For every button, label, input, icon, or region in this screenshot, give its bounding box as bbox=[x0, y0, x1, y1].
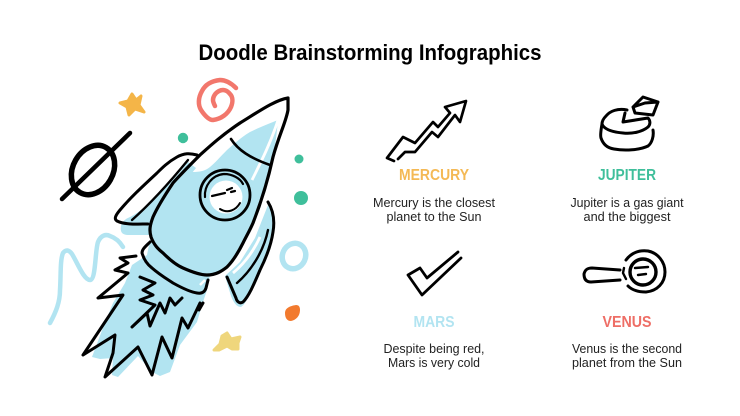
white highlight on fin bbox=[233, 237, 260, 273]
left fin inner line bbox=[132, 160, 188, 220]
icon: pie chart bbox=[601, 97, 658, 150]
nose band bbox=[231, 139, 270, 165]
illustration: rocket bbox=[83, 98, 288, 377]
decoration: orange star bbox=[120, 94, 144, 115]
right fin inner line bbox=[237, 230, 268, 283]
heading: jupiter: JUPITER bbox=[598, 167, 656, 184]
text: venus description: planet from the Sun bbox=[572, 356, 682, 370]
rocket body blue fill bbox=[150, 120, 278, 275]
left fin blue fill bbox=[121, 162, 196, 235]
right fin bbox=[227, 202, 274, 303]
icon: magnifying glass bbox=[584, 251, 665, 292]
item: mars bbox=[384, 252, 484, 370]
inner flames bbox=[132, 277, 182, 327]
icon: rising arrow bbox=[387, 101, 466, 161]
item: venus bbox=[572, 251, 682, 370]
heading: mercury: MERCURY bbox=[399, 167, 469, 184]
decoration: green dots bbox=[178, 133, 308, 205]
white highlight on nose bbox=[252, 120, 278, 180]
text: jupiter description: Jupiter is a gas giant bbox=[570, 196, 684, 210]
porthole bbox=[200, 170, 250, 220]
white highlight on collar bbox=[200, 280, 205, 285]
decoration: ringed planet bbox=[62, 133, 130, 203]
heading: venus: VENUS bbox=[602, 314, 652, 331]
item: mercury bbox=[373, 101, 496, 224]
decoration: orange drop bbox=[285, 305, 300, 321]
decoration: blue ring bbox=[278, 239, 310, 273]
exhaust blue fill bbox=[92, 240, 210, 377]
collar bbox=[142, 242, 208, 293]
text: jupiter description: and the biggest bbox=[584, 210, 671, 224]
text: venus description: Venus is the second bbox=[572, 342, 682, 356]
text: mars description: Despite being red, bbox=[384, 342, 484, 356]
item: jupiter bbox=[570, 97, 684, 224]
text: mars description: Mars is very cold bbox=[388, 356, 480, 370]
text: mercury description: planet to the Sun bbox=[386, 210, 482, 224]
rocket body outline bbox=[150, 98, 288, 275]
right fin blue fill bbox=[225, 205, 273, 307]
heading: mars: MARS bbox=[414, 314, 455, 331]
decoration: blue squiggle bbox=[50, 235, 123, 323]
decoration: yellow star bbox=[214, 333, 240, 350]
text: mercury description: Mercury is the closest bbox=[373, 196, 496, 210]
title: Doodle Brainstorming Infographics bbox=[198, 40, 542, 65]
icon: check mark bbox=[408, 252, 461, 295]
outer flames bbox=[83, 256, 203, 377]
left fin bbox=[115, 154, 197, 224]
decoration: coral spiral bbox=[199, 80, 236, 120]
